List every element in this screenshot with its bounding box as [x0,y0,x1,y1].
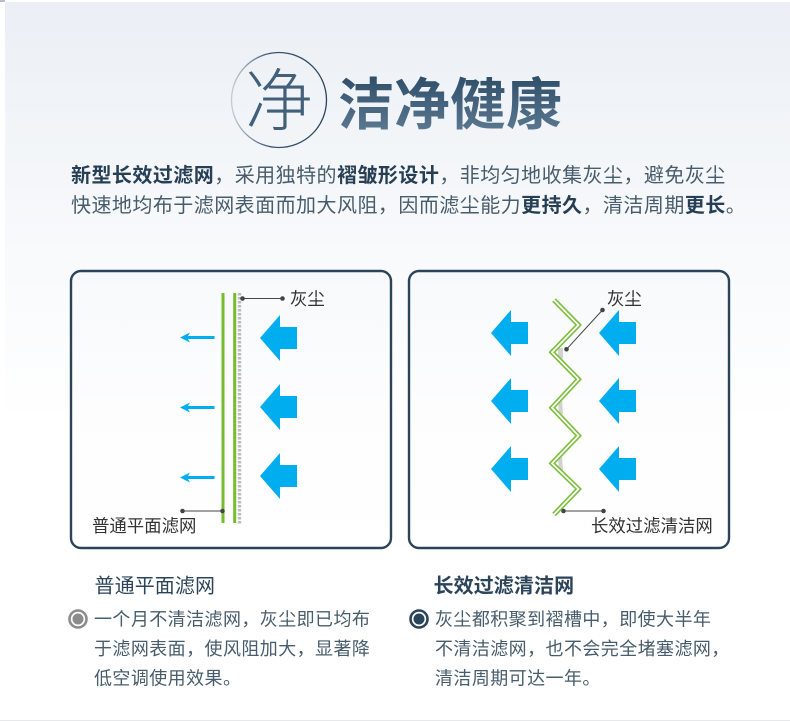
dust leader [564,308,605,352]
filter leader [180,509,225,513]
title: 洁净健康 [338,74,562,136]
big air arrows [260,315,297,499]
intro text [71,164,746,217]
description: 灰尘都积聚到褶槽中，即使大半年 [435,610,711,630]
filter: green lines and dust [222,293,240,525]
icon: circled character: 净 [245,64,313,140]
description: 不清洁滤网，也不会完全堵塞滤网， [435,639,730,659]
filter label: 长效过滤清洁网 [591,516,713,536]
description: 于滤网表面，使风阻加大，显著降 [94,639,370,659]
panel: pleated filter [409,271,729,548]
dust label: 灰尘 [607,289,642,309]
air arrows left column [491,310,528,492]
description: 清洁周期可达一年。 [435,668,601,688]
dust label: 灰尘 [290,289,325,309]
description [94,610,370,688]
description: 一个月不清洁滤网，灰尘即已均布 [94,610,370,630]
intro text: 快速地均布于滤网表面而加大风阻，因而滤尘能力更持久，清洁周期更长。 [71,194,746,217]
intro text: 新型长效过滤网，采用独特的褶皱形设计，非均匀地收集灰尘，避免灰尘 [71,164,726,187]
filter label: 普通平面滤网 [92,516,196,536]
dust leader [240,296,285,301]
icon: circled character [232,52,326,148]
dust in pleats [558,348,563,470]
heading: 普通平面滤网 [94,574,215,598]
pleated filter zigzag [552,300,578,514]
text block: flat filter [70,574,370,688]
filter leader [561,509,606,513]
heading: 长效过滤清洁网 [434,574,574,598]
text block: pleated filter [410,574,730,688]
description [435,610,730,688]
small air arrows [180,332,214,482]
icon: dark radio bullet [410,610,428,628]
description: 低空调使用效果。 [94,668,241,688]
air arrows right column [599,310,636,492]
icon: gray radio bullet [70,610,86,628]
panel: flat filter [71,271,391,548]
